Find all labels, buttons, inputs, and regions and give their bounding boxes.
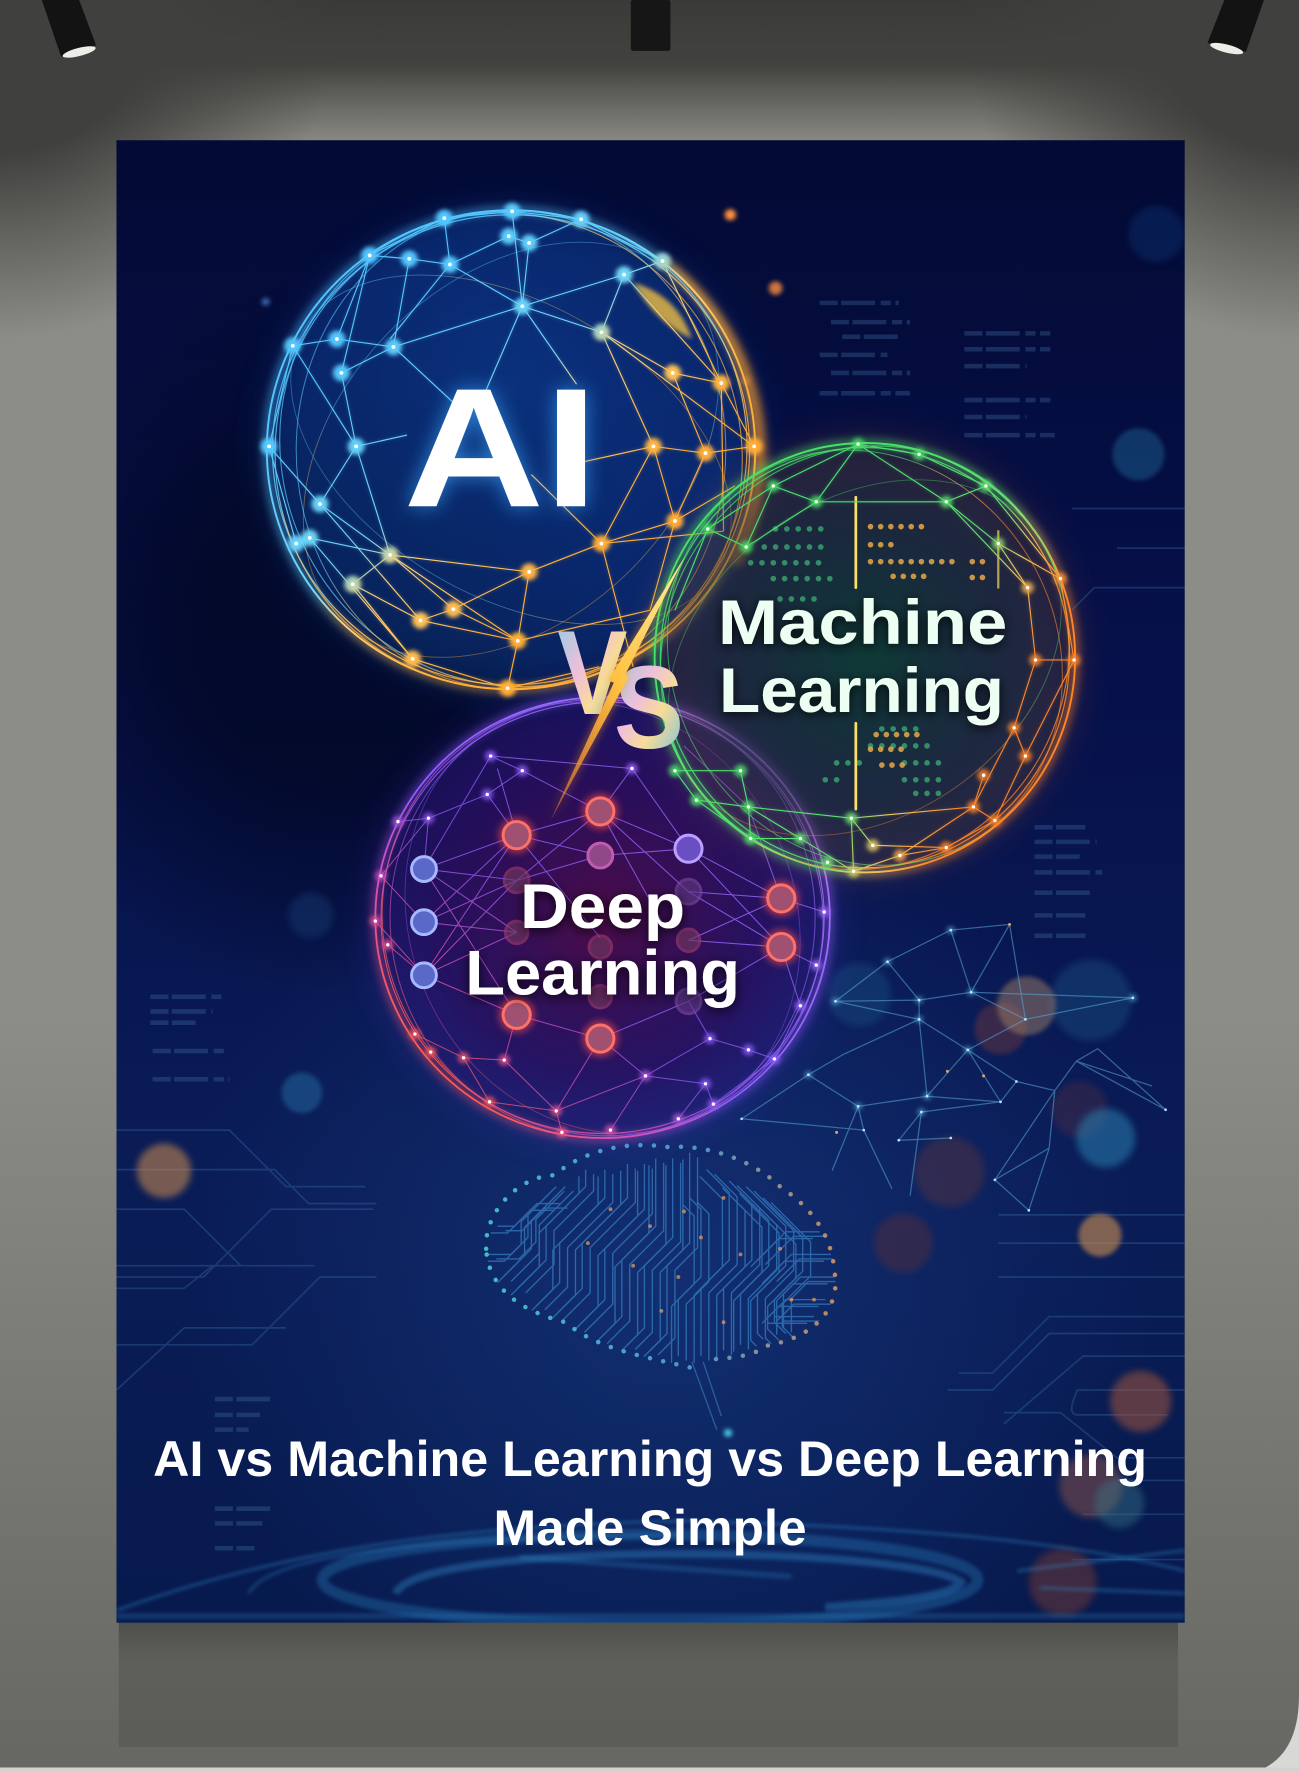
icon: circuit brain	[482, 1145, 842, 1437]
heading: Machine Learning: Machine	[718, 588, 1007, 658]
chart: data dot matrix	[751, 497, 998, 809]
heading: VS with lightning bolt: S	[614, 642, 684, 773]
icon: neural network neurons	[412, 798, 795, 1052]
icon: left ceiling spotlight	[42, 0, 97, 60]
heading: Machine Learning	[718, 588, 1007, 726]
icon: right ceiling spotlight	[1207, 0, 1264, 57]
heading: AI: AI	[404, 353, 598, 542]
heading: Machine Learning: Learning	[719, 656, 1004, 726]
panel: artificial intelligence sphere	[251, 196, 774, 704]
heading: VS with lightning bolt	[551, 556, 685, 820]
panel: machine learning sphere	[638, 426, 1092, 889]
panel: deep learning sphere	[358, 682, 846, 1152]
panel: poster	[116, 128, 1185, 1625]
chart: faint neural network lower right	[742, 924, 1166, 1210]
icon: centre ceiling spotlight	[631, 0, 670, 51]
background: bokeh lights	[137, 206, 1185, 1616]
heading: VS with lightning bolt: V	[557, 607, 628, 740]
background: holographic rings at the base	[116, 1521, 1185, 1625]
heading: Deep Learning: Deep	[520, 872, 685, 942]
heading: AI	[400, 376, 600, 520]
background: code text blocks	[150, 303, 1102, 1548]
background: circuit traces	[116, 509, 1185, 1560]
poster floor reflection	[119, 1623, 1178, 1747]
title	[153, 1431, 1147, 1556]
heading: Deep Learning	[465, 872, 740, 1008]
heading: Deep Learning: Learning	[465, 939, 740, 1008]
title: AI vs Machine Learning vs Deep Learning	[153, 1431, 1147, 1487]
title: Made Simple	[493, 1500, 807, 1556]
icon: lightning bolt	[551, 556, 685, 820]
heading: AI: AI	[404, 353, 598, 542]
